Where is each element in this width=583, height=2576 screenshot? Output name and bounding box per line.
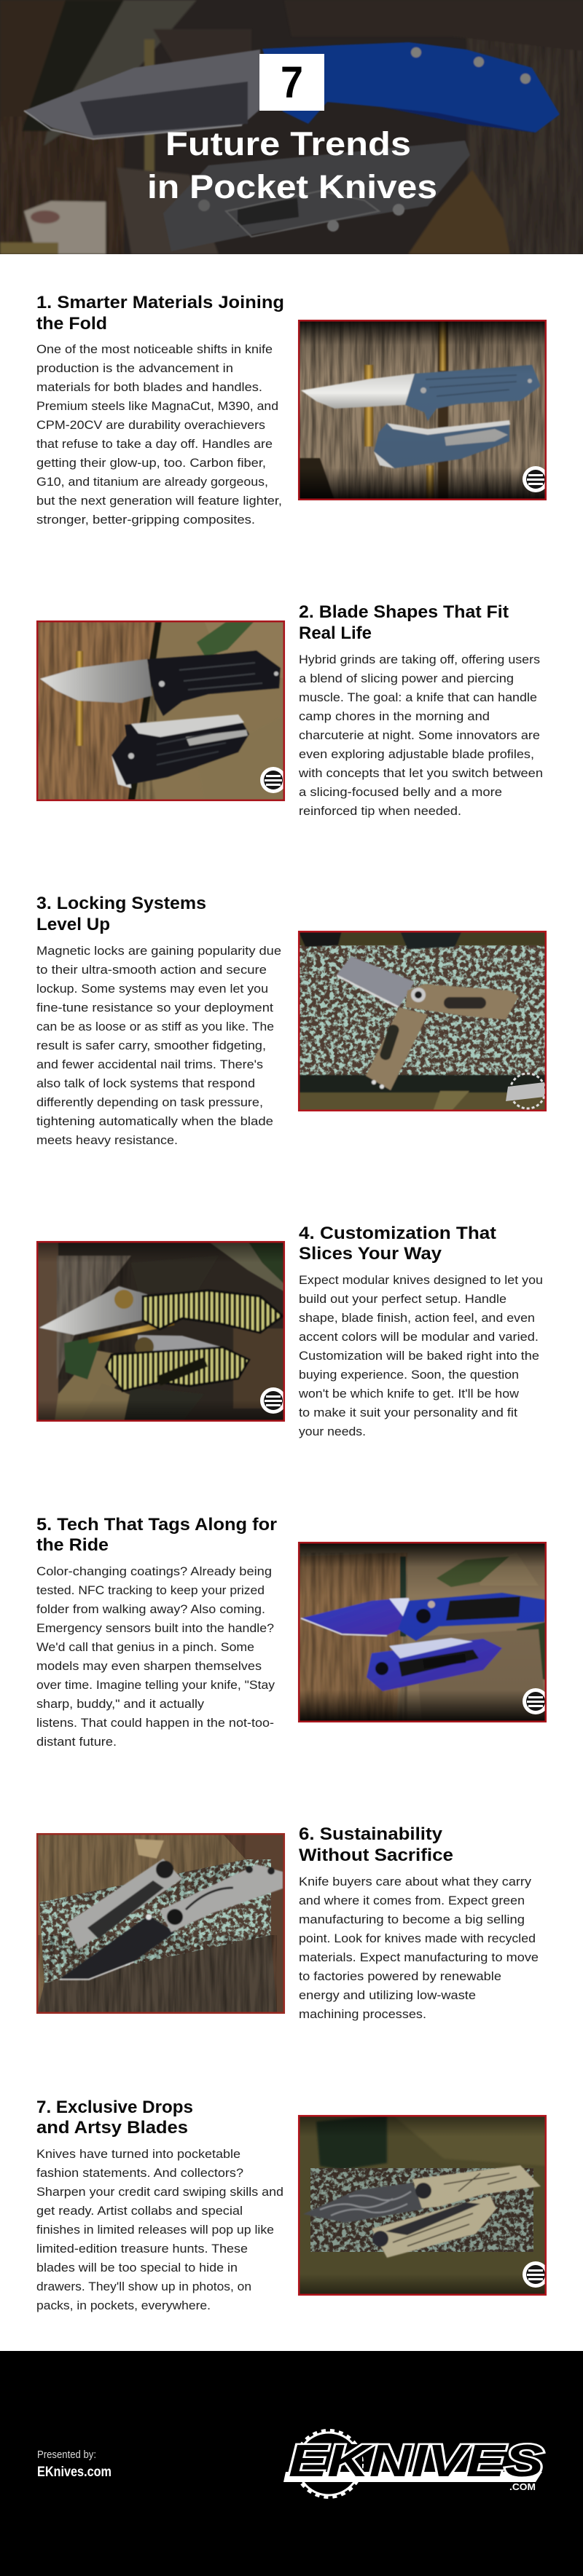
section 7 body text bbox=[36, 2148, 283, 2312]
section 4 body text: won't be which knife to get. It'll be how bbox=[298, 1387, 519, 1401]
title: in Pocket Knives bbox=[147, 168, 437, 205]
section 5 body text: distant future. bbox=[36, 1736, 117, 1749]
section 7 body text: Sharpen your credit card swiping skills and bbox=[36, 2186, 283, 2199]
section 5 heading bbox=[36, 1515, 277, 1555]
section 5 heading: 5. Tech That Tags Along for bbox=[36, 1515, 277, 1535]
section 2 body text: a slicing-focused belly and a more bbox=[299, 786, 502, 799]
section 4 body text: accent colors will be modular and varied. bbox=[299, 1331, 539, 1344]
section 3 body text: fine-tune resistance so your deployment bbox=[36, 1001, 273, 1015]
section 6 heading bbox=[299, 1824, 453, 1865]
section 3 body text: Magnetic locks are gaining popularity due bbox=[36, 945, 281, 958]
section 5 body text: folder from walking away? Also coming. bbox=[36, 1603, 265, 1616]
section 1 body text: materials for both blades and handles. bbox=[36, 381, 262, 394]
section 2 body text: camp chores in the morning and bbox=[299, 710, 490, 723]
section 3 body text: and fewer accidental nail trims. There's bbox=[36, 1058, 263, 1071]
section 4 heading: 4. Customization That bbox=[299, 1224, 496, 1243]
section 2 body text: reinforced tip when needed. bbox=[299, 805, 461, 818]
section 5 photo: blue anodized knives bbox=[298, 1542, 549, 1722]
section 1 body text: getting their glow-up, too. Carbon fiber, bbox=[36, 457, 266, 470]
section 5 body text: Emergency sensors built into the handle? bbox=[36, 1622, 274, 1635]
section 4 body text bbox=[298, 1274, 543, 1438]
section 2 body text: a blend of slicing power and piercing bbox=[299, 672, 514, 685]
section 6 body text: energy and utilizing low-waste bbox=[299, 1989, 476, 2002]
section 2 heading bbox=[299, 602, 509, 643]
section 7 body text: get ready. Artist collabs and special bbox=[36, 2205, 243, 2218]
section 4 body text: buying experience. Soon, the question bbox=[299, 1368, 519, 1382]
hero photo: two knives on wood bbox=[0, 0, 583, 254]
section 3 heading: Level Up bbox=[36, 915, 110, 934]
section 3 body text: tightening automatically when the blade bbox=[36, 1115, 273, 1128]
section 6 body text: and where it comes from. Expect green bbox=[299, 1894, 525, 1907]
section 2 body text: muscle. The goal: a knife that can handle bbox=[299, 691, 537, 704]
footer panel bbox=[0, 2351, 583, 2576]
title: Future Trends bbox=[165, 125, 411, 162]
section 7 body text: limited-edition treasure hunts. These bbox=[36, 2242, 248, 2256]
section 7 body text: fashion statements. And collectors? bbox=[36, 2167, 243, 2180]
section 3 body text bbox=[36, 945, 281, 1147]
section 6 body text: materials. Expect manufacturing to move bbox=[299, 1951, 539, 1964]
section 3 body text: meets heavy resistance. bbox=[36, 1134, 178, 1147]
section 3 body text: lockup. Some systems may even let you bbox=[36, 982, 268, 996]
section 3 heading: 3. Locking Systems bbox=[36, 894, 206, 913]
header panel bbox=[0, 0, 583, 254]
section 7 body text: blades will be too special to hide in bbox=[36, 2261, 238, 2274]
section 7 heading bbox=[36, 2098, 193, 2138]
section 6 body text: machining processes. bbox=[299, 2008, 426, 2021]
EKnives logo bbox=[283, 2431, 544, 2497]
section 4 body text: Expect modular knives designed to let you bbox=[299, 1274, 543, 1287]
section 3 body text: to their ultra-smooth action and secure bbox=[36, 964, 267, 977]
section 6 heading: Without Sacrifice bbox=[299, 1846, 453, 1865]
number box bbox=[259, 54, 324, 111]
EKnives logo: .COM bbox=[509, 2481, 536, 2492]
title bbox=[149, 131, 436, 198]
presented by text bbox=[37, 2449, 111, 2480]
section 1 heading: 1. Smarter Materials Joining bbox=[36, 293, 284, 312]
blade bbox=[24, 50, 260, 138]
section 5 body text: listens. That could happen in the not-too- bbox=[36, 1717, 274, 1730]
section 6 body text: point. Look for knives made with recycled bbox=[299, 1932, 536, 1945]
presented by text: EKnives.com bbox=[37, 2465, 111, 2480]
section 6 body text bbox=[299, 1875, 539, 2021]
section 2 body text: with concepts that let you switch between bbox=[298, 767, 543, 780]
section 6 photo: black blade knife on patina box bbox=[36, 1833, 285, 2015]
section 3 heading bbox=[36, 894, 206, 934]
section 5 body text: We'd call that genius in a pinch. Some bbox=[36, 1641, 254, 1654]
section 1 body text: G10, and titanium are already gorgeous, bbox=[36, 476, 268, 489]
section 4 body text: to make it suit your personality and fit bbox=[299, 1406, 517, 1419]
section 1 body text: CPM-20CV are durability overachievers bbox=[36, 419, 265, 432]
section 5 body text: over time. Imagine telling your knife, "Stay bbox=[36, 1679, 275, 1692]
section 2 body text bbox=[298, 653, 543, 818]
section 1 heading bbox=[36, 293, 284, 334]
section 5 body text: sharp, buddy," and it actually bbox=[36, 1698, 205, 1711]
lower knife bbox=[163, 141, 470, 251]
section 3 body text: result is safer carry, smoother fidgeting, bbox=[36, 1039, 266, 1052]
section 5 body text: Color-changing coatings? Already being bbox=[36, 1565, 272, 1578]
section 2 body text: even exploring adjustable blade profiles, bbox=[299, 748, 534, 761]
section 2 heading: Real Life bbox=[299, 623, 372, 643]
section 3 photo: tan knife on patina box bbox=[298, 931, 547, 1111]
section 2 body text: charcuterie at night. Some innovators are bbox=[299, 729, 540, 742]
section 1 body text: stronger, better-gripping composites. bbox=[36, 513, 255, 527]
section 2 photo: black folding knives on wood and glove bbox=[36, 621, 286, 801]
section 5 heading: the Ride bbox=[36, 1535, 109, 1555]
section 3 body text: can be as loose or as stiff as you like. The bbox=[36, 1020, 274, 1033]
blue handle bbox=[262, 42, 560, 133]
section 3 body text: also talk of lock systems that respond bbox=[36, 1077, 255, 1090]
section 2 heading: 2. Blade Shapes That Fit bbox=[299, 602, 509, 622]
presented by text: Presented by: bbox=[37, 2449, 96, 2461]
section 7 body text: Knives have turned into pocketable bbox=[36, 2148, 240, 2161]
section 6 body text: manufacturing to become a big selling bbox=[299, 1913, 525, 1926]
section 7 body text: packs, in pockets, everywhere. bbox=[36, 2299, 211, 2312]
section 1 body text: Premium steels like MagnaCut, M390, and bbox=[36, 400, 278, 413]
section 1 body text: but the next generation will feature lighter, bbox=[36, 495, 282, 508]
section 4 body text: Customization will be baked right into the bbox=[299, 1350, 539, 1363]
section 2 body text: Hybrid grinds are taking off, offering users bbox=[299, 653, 540, 666]
section 3 body text: differently depending on task pressure, bbox=[36, 1096, 263, 1109]
section 1 body text bbox=[36, 343, 282, 527]
section 6 body text: to factories powered by renewable bbox=[299, 1970, 501, 1983]
section 6 body text: Knife buyers care about what they carry bbox=[299, 1875, 532, 1888]
section 5 body text bbox=[36, 1565, 275, 1749]
section 5 body text: models may even sharpen themselves bbox=[36, 1660, 262, 1673]
section 1 heading: the Fold bbox=[36, 314, 107, 334]
section 4 heading: Slices Your Way bbox=[299, 1244, 442, 1264]
section 4 body text: shape, blade finish, action feel, and even bbox=[299, 1312, 535, 1325]
section 4 body text: build out your perfect setup. Handle bbox=[299, 1293, 506, 1306]
section 7 heading: 7. Exclusive Drops bbox=[36, 2098, 193, 2117]
section 1 photo: blue-grey folding knives on wood bbox=[298, 320, 549, 500]
section 7 photo: engraved knives with damascus blades bbox=[298, 2115, 549, 2296]
watermark: EK gear bbox=[506, 1074, 545, 1108]
section 7 heading: and Artsy Blades bbox=[36, 2118, 188, 2138]
section 1 body text: production is the advancement in bbox=[36, 362, 233, 375]
section 7 body text: finishes in limited releases will pop up like bbox=[36, 2224, 274, 2237]
EKnives logo: EKNIVES bbox=[289, 2436, 544, 2486]
number box: 7 bbox=[281, 58, 303, 107]
section 1 body text: that refuse to take a day off. Handles are bbox=[36, 438, 273, 451]
section 4 photo: yellow striped knives on straps bbox=[36, 1241, 286, 1422]
section 4 body text: your needs. bbox=[299, 1425, 366, 1438]
section 4 heading bbox=[299, 1224, 496, 1264]
section 5 body text: tested. NFC tracking to keep your prized bbox=[36, 1584, 265, 1597]
section 7 body text: drawers. They'll show up in photos, on bbox=[36, 2280, 251, 2293]
section 1 body text: One of the most noticeable shifts in knife bbox=[36, 343, 273, 356]
section 6 heading: 6. Sustainability bbox=[299, 1824, 442, 1844]
